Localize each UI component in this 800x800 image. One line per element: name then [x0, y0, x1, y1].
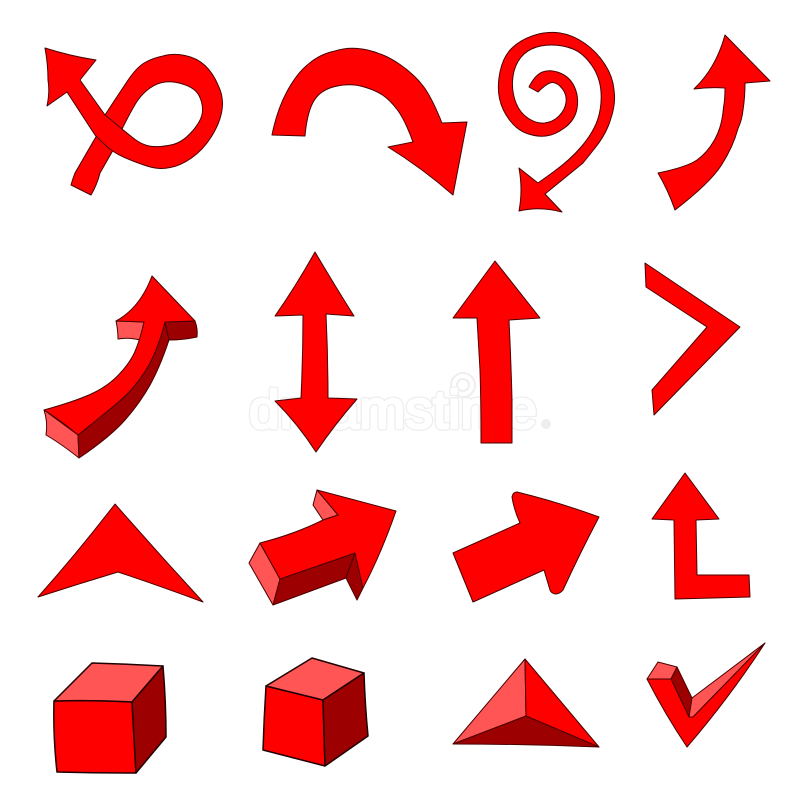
watermark: dreamstime [249, 380, 537, 440]
icon: up arrow [453, 261, 540, 443]
icon: 3D check mark [647, 643, 765, 747]
icon: 3D diagonal arrow [249, 490, 396, 605]
icon: pyramid [453, 659, 599, 747]
watermark: dreamstime [249, 380, 537, 440]
icon: cube right [263, 658, 368, 766]
icon: curved over arrow [272, 48, 467, 195]
icon: looped arrow [45, 48, 222, 195]
icon: double-headed vertical arrow [275, 252, 357, 452]
icon: cube left [54, 663, 166, 773]
icon: 3D curved arrow [44, 276, 197, 458]
icon: right chevron [645, 263, 740, 415]
icon: up chevron [38, 504, 203, 602]
icon: L-shaped arrow [652, 473, 750, 599]
icon: flat diagonal arrow [453, 492, 599, 602]
icon: curved up arrow [658, 35, 770, 210]
icon: spiral arrow [498, 32, 615, 212]
